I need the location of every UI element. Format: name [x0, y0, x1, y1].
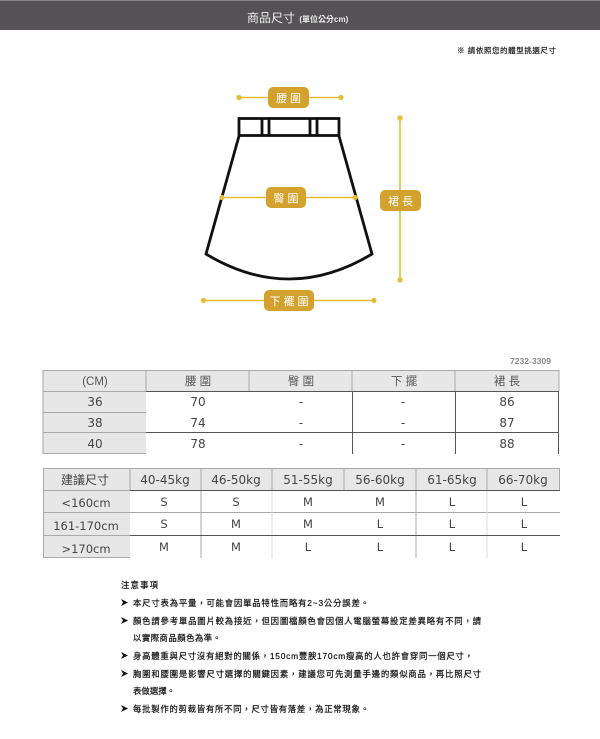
- measure: hem: [201, 290, 377, 311]
- row 36: 36: [87, 395, 103, 409]
- notes: [121, 580, 482, 714]
- table header row: [61, 473, 548, 487]
- measure: hem: 下 襬 圍: [269, 295, 309, 308]
- row under 160cm: <160cm: [61, 496, 111, 510]
- measure: waist: [236, 87, 344, 108]
- row 38: -: [299, 416, 303, 430]
- note: choose size by body shape: ※ 請依照您的體型挑選尺寸: [457, 45, 556, 55]
- row 40: -: [299, 437, 303, 451]
- row 38: 74: [190, 416, 206, 430]
- note 1: 本尺寸表為平量，可能會因單品特性而略有2~3公分誤差。: [133, 598, 369, 608]
- row 40: 78: [190, 437, 206, 451]
- measure: hip: 臀 圍: [273, 192, 299, 205]
- table header row: 腰 圍: [185, 375, 211, 388]
- row over 170cm: [61, 540, 528, 556]
- row 36: -: [401, 395, 405, 409]
- skirt diagram: [201, 87, 421, 311]
- table: measurements: [43, 370, 559, 454]
- measure: hip: [219, 187, 358, 208]
- row 38: 87: [499, 416, 515, 430]
- row 40: -: [401, 437, 405, 451]
- note 2: 顏色請參考單品圖片較為接近，但因圖檔顏色會因個人電腦螢幕設定差異略有不同，請: [133, 616, 482, 626]
- measure: waist: 腰 圍: [276, 92, 301, 105]
- row over 170cm: M: [231, 540, 241, 554]
- row under 160cm: L: [449, 495, 456, 509]
- row 161-170cm: M: [303, 517, 313, 531]
- note 5: 每批製作的剪裁皆有所不同，尺寸皆有落差，為正常現象。: [133, 704, 369, 714]
- note 4: 表做選擇。: [133, 686, 175, 696]
- product code: 7232-3309: [510, 356, 551, 366]
- note 4: [121, 669, 481, 696]
- skirt outline: [206, 118, 372, 279]
- row over 170cm: L: [521, 540, 528, 554]
- title: 商品尺寸 (單位公分cm): [247, 10, 349, 25]
- row 40: 88: [499, 437, 515, 451]
- table header row: 裙 長: [494, 375, 521, 388]
- row 161-170cm: [53, 517, 528, 533]
- row 40: 40: [87, 437, 103, 451]
- table header row: 51-55kg: [283, 473, 333, 487]
- row 40: [87, 437, 515, 451]
- row 36: [87, 395, 515, 409]
- row over 170cm: L: [377, 540, 384, 554]
- table header row: 建議尺寸: [61, 473, 109, 487]
- table header row: [82, 374, 521, 388]
- table header row: 66-70kg: [498, 473, 548, 487]
- row 161-170cm: L: [449, 517, 456, 531]
- row under 160cm: M: [375, 495, 385, 509]
- row 161-170cm: L: [521, 517, 528, 531]
- note 2: [121, 616, 482, 643]
- measure: length: 裙 長: [388, 195, 413, 208]
- measure: length: [380, 115, 421, 283]
- row under 160cm: S: [232, 495, 240, 509]
- header bar: [0, 0, 600, 30]
- table header row: 61-65kg: [427, 473, 477, 487]
- note 3: 身高體重與尺寸沒有絕對的關係，150cm豐腴170cm瘦高的人也許會穿同一個尺寸，: [133, 651, 473, 661]
- row over 170cm: L: [449, 540, 456, 554]
- row over 170cm: L: [305, 540, 312, 554]
- row under 160cm: M: [303, 495, 313, 509]
- table header row: 40-45kg: [140, 473, 190, 487]
- table header row: 56-60kg: [355, 473, 405, 487]
- row 38: 38: [87, 416, 103, 430]
- table header row: (CM): [82, 376, 108, 388]
- row 161-170cm: 161-170cm: [53, 519, 119, 533]
- row under 160cm: L: [521, 495, 528, 509]
- table header row: 下 擺: [391, 374, 418, 388]
- table header row: 臀 圍: [288, 375, 314, 388]
- row over 170cm: >170cm: [61, 542, 111, 556]
- row 161-170cm: S: [160, 517, 168, 531]
- note 2: 以實際商品顏色為準。: [133, 633, 221, 643]
- row over 170cm: M: [159, 540, 169, 554]
- row 36: 86: [499, 395, 515, 409]
- row 161-170cm: M: [231, 517, 241, 531]
- note 4: 胸圍和腰圍是影響尺寸選擇的關鍵因素，建議您可先測量手邊的類似商品，再比照尺寸: [133, 669, 481, 679]
- table: recommended size: [43, 468, 560, 558]
- row 38: -: [401, 416, 405, 430]
- table header row: 46-50kg: [211, 473, 261, 487]
- row 38: [87, 416, 515, 430]
- row 161-170cm: L: [377, 517, 384, 531]
- row 36: -: [299, 395, 303, 409]
- row 36: 70: [190, 395, 206, 409]
- row under 160cm: S: [160, 495, 168, 509]
- row under 160cm: [61, 495, 528, 510]
- notes heading: 注意事項: [121, 580, 159, 590]
